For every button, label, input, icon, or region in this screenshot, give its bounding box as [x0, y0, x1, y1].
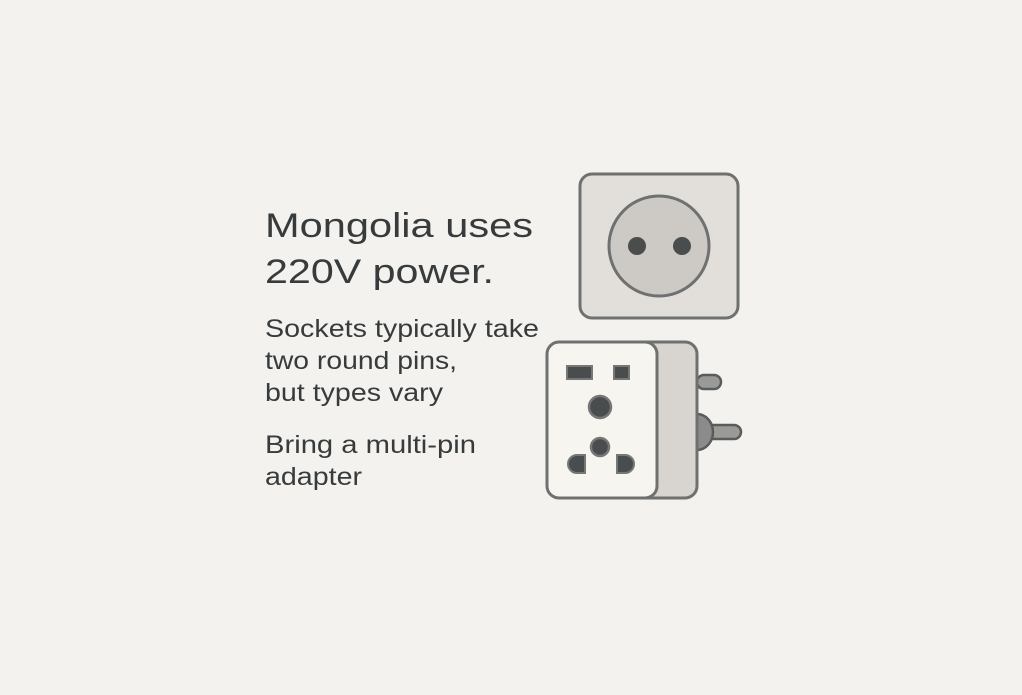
- title: [265, 207, 533, 291]
- text: socket types: Sockets typically take: [265, 315, 539, 343]
- title: 220V power.: [265, 253, 494, 291]
- text: adapter advice: Bring a multi-pin: [265, 431, 476, 459]
- icon: multi-pin adapter: [547, 342, 741, 498]
- text: adapter advice: [265, 431, 476, 491]
- icon: wall socket: [580, 174, 738, 318]
- text: socket types: [265, 315, 539, 407]
- text: socket types: two round pins,: [265, 347, 457, 375]
- title: Mongolia uses: [265, 207, 533, 245]
- text: socket types: but types vary: [265, 379, 444, 407]
- text: adapter advice: adapter: [265, 463, 362, 491]
